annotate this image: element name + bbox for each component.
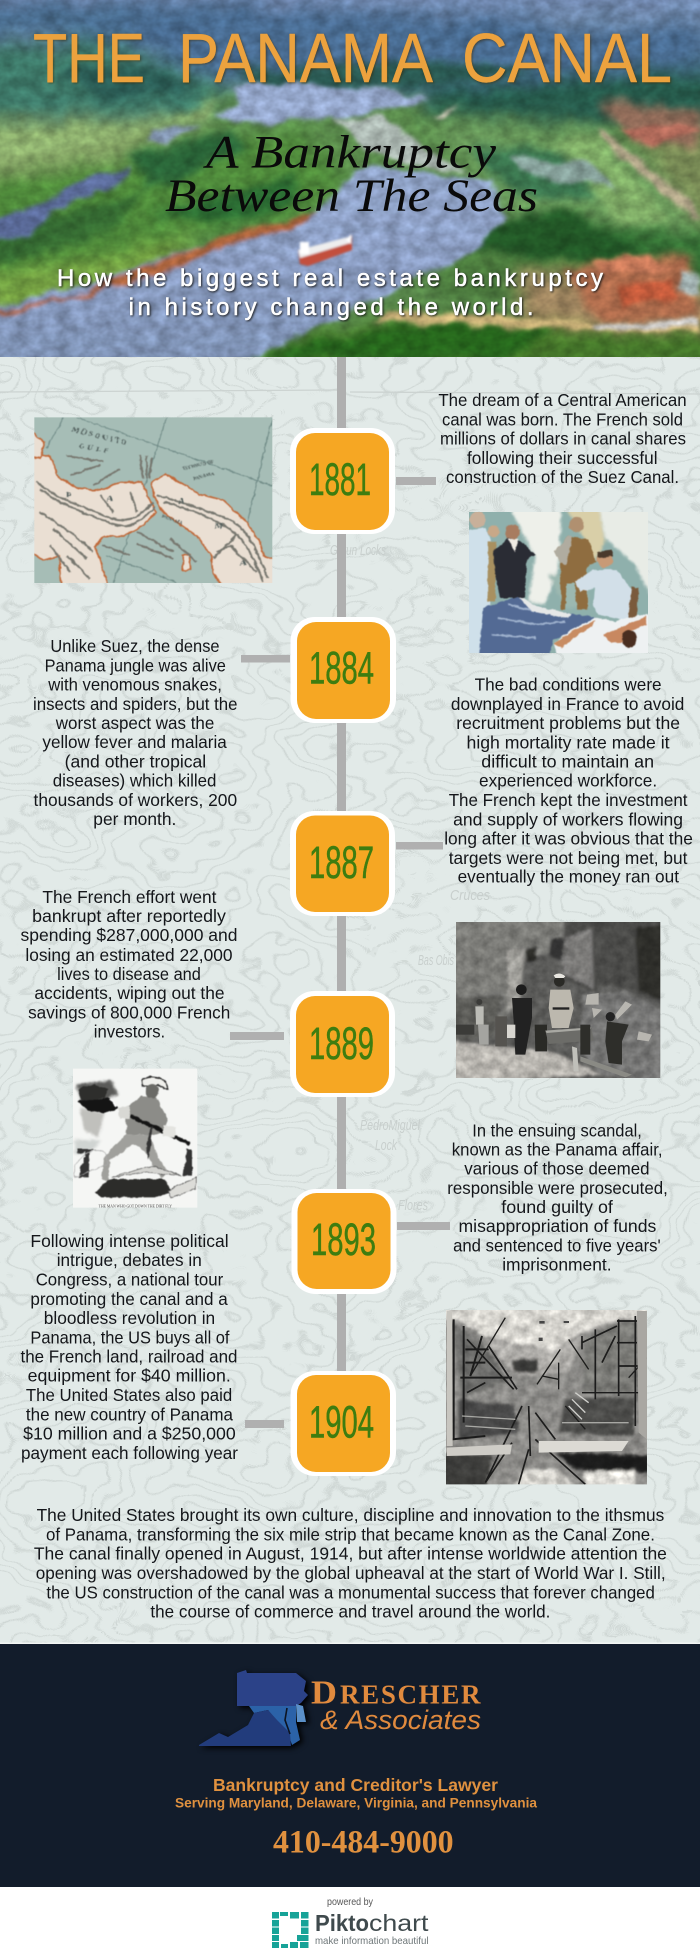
text: firm tagline: Serving Maryland, Delaware, Virginia, and Pennsylvania <box>175 1796 537 1811</box>
text: closing paragraph: opening was overshadowed by the global upheaval at the start of World War I. Still, <box>36 1563 666 1583</box>
image: workers with wheelbarrow in the cut <box>456 922 660 1078</box>
year badge 1884: 1884 <box>309 642 374 693</box>
text: 1904: intrigue, debates in <box>57 1250 202 1270</box>
year badge 1889: 1889 <box>309 1018 374 1069</box>
text: closing paragraph: The canal finally opened in August, 1914, but after intense worldwide attention the <box>34 1544 667 1564</box>
text: 1889: accidents, wiping out the <box>34 983 225 1003</box>
text: 1881: canal was born. The French sold <box>442 409 683 429</box>
text: firm tagline: Bankruptcy and Creditor's Lawyer <box>213 1775 498 1795</box>
text: 1893: In the ensuing scandal, <box>472 1120 642 1140</box>
year badge 1893 <box>292 1189 396 1294</box>
text: 1904 <box>20 1231 238 1463</box>
text: closing paragraph <box>34 1505 667 1621</box>
panel: hero aerial photo of the canal <box>0 0 700 390</box>
text: 1889: spending $287,000,000 and <box>20 925 238 945</box>
logo: Piktochart wordmark <box>315 1910 429 1947</box>
text: 1887: and supply of workers flowing <box>453 809 683 829</box>
image: antique map of Panama: P <box>66 490 72 500</box>
text: 1884: Unlike Suez, the dense <box>50 636 220 656</box>
text: 1893: misappropriation of funds <box>458 1216 657 1236</box>
text: 1904: Panama, the US buys all of <box>30 1327 230 1347</box>
text: 1904: the new country of Panama <box>26 1404 233 1424</box>
connector 1881 <box>396 477 436 485</box>
image: antique map of Panama: ISTHMUS OF <box>183 460 214 472</box>
panel: Piktochart footer <box>0 1887 700 1958</box>
panel: timeline map background: Cruces <box>450 887 490 904</box>
connector 1889 <box>230 1032 284 1040</box>
text: 1884 <box>33 636 238 829</box>
logo: Piktochart wordmark: Pikto <box>315 1910 369 1936</box>
text: 1884: Panama jungle was alive <box>45 655 226 675</box>
text: 1904: bloodless revolution in <box>44 1308 215 1328</box>
year badge 1887: 1887 <box>309 837 374 888</box>
text: closing paragraph: the US construction of the canal was a monumental success that forever changed <box>46 1582 655 1602</box>
text: 1887: targets were not being met, but <box>449 848 688 868</box>
image: antique map of Panama <box>34 417 272 583</box>
image: antique map of Panama: M <box>215 521 223 531</box>
text: closing paragraph: of Panama, transforming the six mile strip that became known as the Canal Zone. <box>46 1524 655 1544</box>
text: 1881: millions of dollars in canal shares <box>440 429 686 449</box>
text: closing paragraph: the course of commerce and travel around the world. <box>150 1601 550 1621</box>
text: 1893: imprisonment. <box>502 1255 612 1275</box>
panel: timeline map background: PedroMiguel <box>360 1117 420 1134</box>
text: 1881 <box>438 390 687 487</box>
text: 1904: payment each following year <box>21 1443 238 1463</box>
text: 1893 <box>447 1120 668 1275</box>
logo: firm name <box>311 1674 481 1735</box>
tagline <box>57 265 603 321</box>
logo: mid-Atlantic states map <box>199 1670 308 1746</box>
text: 1893: responsible were prosecuted, <box>447 1178 668 1198</box>
image: antique map of Panama: PANAMA <box>161 514 183 527</box>
year badge 1889 <box>290 991 395 1097</box>
text: phone number: 410-484-9000 <box>273 1825 454 1861</box>
tagline: in history changed the world. <box>129 294 534 321</box>
text: 1887: difficult to maintain an <box>481 751 654 771</box>
title: CANAL <box>462 19 672 97</box>
logo: firm name: D <box>311 1674 337 1711</box>
text: 1887: long after it was obvious that the <box>444 829 693 849</box>
image: antique map of Panama: GULF <box>78 441 110 455</box>
text: 1884: (and other tropical <box>65 751 206 771</box>
timeline spine <box>337 357 346 1407</box>
image: antique map of Panama: A <box>107 493 114 503</box>
text: 1889 <box>20 887 238 1042</box>
text: 1887: eventually the money ran out <box>458 866 679 886</box>
text: closing paragraph: The United States brought its own culture, discipline and innovation to the ithsmus <box>37 1505 665 1525</box>
text: 1884: thousands of workers, 200 <box>34 790 237 810</box>
text: 1904: The United States also paid <box>26 1385 232 1405</box>
river and lakes <box>210 80 428 124</box>
panel: timeline map background <box>0 357 700 1644</box>
text: 1884: worst aspect was the <box>55 713 214 733</box>
text: 1893: and sentenced to five years' <box>453 1235 661 1255</box>
text: 1893: found guilty of <box>501 1197 613 1217</box>
logo: Piktochart wordmark: chart <box>369 1910 429 1936</box>
text: 1889: losing an estimated 22,000 <box>25 945 233 965</box>
text: 1889: investors. <box>94 1022 165 1042</box>
subtitle: Between The Seas <box>165 170 538 222</box>
text: 1887: high mortality rate made it <box>466 732 670 752</box>
image: antique map of Panama: A <box>178 496 185 506</box>
text: 1889: lives to disease and <box>57 964 201 984</box>
text: 1889: The French effort went <box>42 887 217 907</box>
image: canal lock construction <box>446 1310 647 1484</box>
text: 1884: diseases) which killed <box>53 771 217 791</box>
text: 1893: various of those deemed <box>464 1159 650 1179</box>
text: 1884: per month. <box>93 809 176 829</box>
text: 1904: the French land, railroad and <box>20 1346 238 1366</box>
ship <box>298 235 352 266</box>
text: 1904: promoting the canal and a <box>30 1289 228 1309</box>
image: antique map of Panama: MOSQUITO <box>71 425 129 447</box>
panel: timeline map background: Lock <box>375 1137 398 1154</box>
title <box>34 32 672 85</box>
text: 1887: recruitment problems but the <box>456 713 680 733</box>
logo: firm name: RESCHER <box>340 1679 481 1709</box>
panel: timeline map background: Flores <box>398 1197 428 1214</box>
title: THE <box>33 19 145 97</box>
image: political cartoon of Roosevelt digging <box>73 1068 198 1208</box>
text: 1889: savings of 800,000 French <box>28 1002 230 1022</box>
panel: timeline map background: Gatun Locks <box>330 542 386 559</box>
year badge 1887 <box>290 811 395 916</box>
year badge 1893: 1893 <box>311 1214 376 1265</box>
text: 1904: equipment for $40 million. <box>28 1366 231 1386</box>
logo: Piktochart wordmark: make information beautiful <box>315 1935 428 1947</box>
text: 1887: experienced workforce. <box>479 771 657 791</box>
year badge 1904 <box>290 1371 396 1476</box>
text: 1884: with venomous snakes, <box>47 675 222 695</box>
text: 1881: The dream of a Central American <box>438 390 687 410</box>
subtitle <box>166 135 536 212</box>
text: firm tagline <box>175 1775 537 1811</box>
panel: footer firm band <box>0 1642 700 1887</box>
year badge 1904: 1904 <box>309 1397 374 1448</box>
image: antique map of Panama: A <box>240 557 247 567</box>
image: antique map of Panama: PANAMA <box>193 472 215 482</box>
panel: timeline map background: Bas Obis <box>418 952 454 969</box>
connector 1884 <box>241 655 290 662</box>
tagline: How the biggest real estate bankruptcy <box>57 265 603 292</box>
text: 1881: construction of the Suez Canal. <box>446 467 679 487</box>
icon: Piktochart mark <box>272 1912 308 1948</box>
year badge 1884 <box>290 617 396 723</box>
text: 1887 <box>444 675 693 886</box>
text: 1887: The bad conditions were <box>475 675 662 695</box>
year badge 1881 <box>290 428 395 534</box>
text: 1884: yellow fever and malaria <box>42 732 227 752</box>
subtitle: A Bankruptcy <box>203 126 496 178</box>
logo: firm name: & Associates <box>320 1705 481 1735</box>
text: powered by: powered by <box>327 1896 374 1908</box>
text: 1887: The French kept the investment <box>449 790 688 810</box>
image: painting of doctors at a bedside <box>469 512 648 653</box>
text: 1904: Following intense political <box>30 1231 229 1251</box>
connector 1893 <box>397 1222 450 1230</box>
text: 1881: following their successful <box>467 448 658 468</box>
text: 1884: insects and spiders, but the <box>33 694 238 714</box>
text: 1893: known as the Panama affair, <box>452 1140 662 1160</box>
year badge 1881: 1881 <box>309 454 371 505</box>
image: political cartoon of Roosevelt digging: THE MAN WHO GOT DOWN THE DIRT FLY <box>99 1203 172 1208</box>
text: 1887: downplayed in France to avoid <box>451 694 684 714</box>
text: 1889: bankrupt after reportedly <box>32 906 226 926</box>
text: 1904: Congress, a national tour <box>36 1270 223 1290</box>
connector 1904 <box>245 1420 284 1428</box>
text: 1904: $10 million and a $250,000 <box>23 1424 236 1444</box>
connector 1887 <box>396 842 443 850</box>
title: PANAMA <box>178 19 433 97</box>
